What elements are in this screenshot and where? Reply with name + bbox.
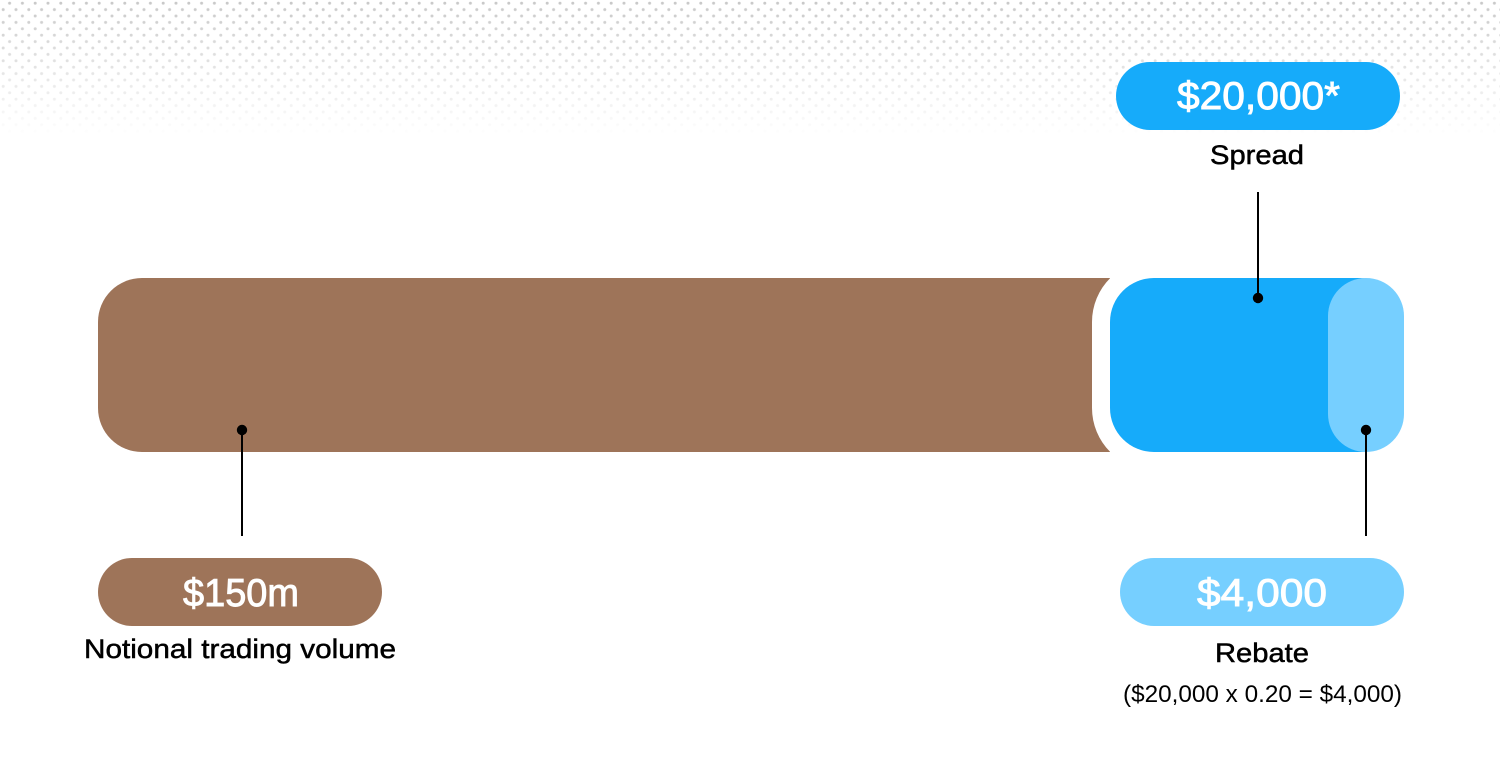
bar segment: rebate	[1328, 278, 1404, 452]
label: rebate: Rebate	[1215, 638, 1309, 668]
white gap around spread segment	[1092, 260, 1422, 470]
callout: notional volume value	[98, 558, 382, 626]
bar segment: notional trading volume	[98, 278, 1110, 452]
callout: rebate value	[1120, 558, 1404, 626]
callout: rebate value: $4,000	[1197, 572, 1327, 615]
callout: spread value: $20,000*	[1177, 75, 1340, 118]
label: notional trading volume: Notional trading volume	[84, 634, 396, 664]
callout: notional volume value: $150m	[183, 572, 299, 615]
text: rebate formula: ($20,000 x 0.20 = $4,000)	[1123, 681, 1402, 708]
dotted background band	[0, 0, 1500, 136]
callout: spread value	[1116, 62, 1400, 130]
leader line: spread	[1253, 192, 1263, 303]
leader line: rebate	[1361, 425, 1371, 536]
bar segment: spread	[1110, 278, 1404, 452]
stacked bar	[98, 260, 1422, 470]
leader line: notional trading volume	[237, 425, 247, 536]
label: spread: Spread	[1210, 140, 1304, 170]
